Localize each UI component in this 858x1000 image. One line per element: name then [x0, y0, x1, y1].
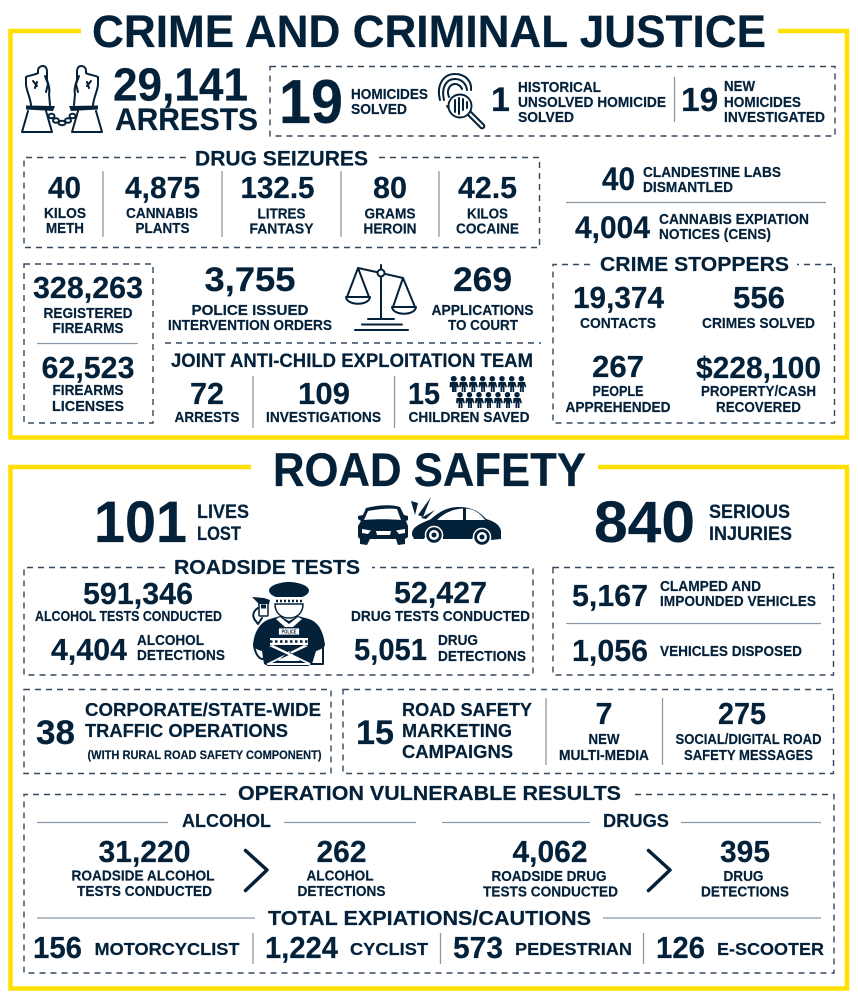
stat: new multi-media: MULTI-MEDIA — [559, 748, 649, 764]
stat: investigations: INVESTIGATIONS — [266, 410, 381, 426]
homicides solved — [279, 68, 428, 137]
panel: homicides — [270, 66, 835, 137]
stat: clamped vehicles: 5,167 — [572, 579, 648, 613]
stat: campaigns: CAMPAIGNS — [402, 741, 513, 762]
stat: fantasy: FANTASY — [250, 222, 314, 238]
stat: meth — [44, 171, 86, 237]
stat: motorcyclist: MOTORCYCLIST — [94, 939, 240, 959]
panel: firearms — [24, 264, 153, 423]
stat: social messages: 275 — [718, 697, 766, 731]
icon: car crash — [358, 497, 501, 546]
stat: cocaine: KILOS — [467, 206, 508, 222]
new homicides investigated: HOMICIDES — [724, 95, 801, 111]
stat: serious injuries: SERIOUS — [709, 501, 790, 523]
heading: crime stoppers: CRIME STOPPERS — [600, 253, 789, 276]
arrow: alcohol tests to detections — [246, 850, 267, 890]
panel: roadside tests — [24, 556, 533, 675]
stat: drug tests: 52,427 — [394, 575, 487, 610]
stat: roadside alcohol tests: 31,220 — [98, 835, 190, 869]
stat: people apprehended: APPREHENDED — [566, 400, 670, 416]
stat: alcohol detections: ALCOHOL — [137, 633, 204, 649]
stat: pedestrian: 573 — [453, 931, 503, 965]
stat: campaigns — [356, 699, 532, 762]
stat: serious injuries: 840 — [594, 490, 695, 555]
stat: clamped vehicles — [572, 579, 816, 613]
heading: operation vulnerable results: OPERATION VULNERABLE RESULTS — [238, 782, 621, 805]
stat: roadside drug tests: ROADSIDE DRUG — [492, 869, 606, 885]
stat: investigations: 109 — [298, 377, 350, 411]
heading: joint anti-child exploitation team: JOINT ANTI-CHILD EXPLOITATION TEAM — [171, 351, 533, 372]
homicides solved: 19 — [279, 68, 343, 137]
stat: campaigns: MARKETING — [402, 720, 512, 741]
heading: total expiations and cautions: TOTAL EXPIATIONS/CAUTIONS — [268, 907, 591, 930]
stat: alcohol detections: ALCOHOL — [306, 868, 374, 884]
stat: motorcyclist — [33, 931, 240, 965]
icon: children row — [449, 376, 526, 408]
stat: meth: KILOS — [44, 206, 86, 222]
arrests stat — [113, 58, 258, 137]
stat: cocaine: 42.5 — [458, 171, 517, 205]
stat: new multi-media: NEW — [588, 732, 620, 748]
stat: social messages: SAFETY MESSAGES — [684, 748, 813, 764]
stat: fantasy: 132.5 — [240, 171, 315, 205]
stat: cannabis expiation notices — [575, 209, 809, 245]
stat: pedestrian — [453, 931, 632, 965]
stat: cyclist: CYCLIST — [350, 939, 428, 959]
stat: crimes solved: 556 — [733, 281, 785, 315]
homicides solved: SOLVED — [351, 102, 407, 118]
stat: new multi-media — [559, 697, 649, 764]
stat: motorcyclist: 156 — [33, 931, 82, 965]
stat: social messages — [676, 697, 822, 764]
stat: alcohol detections: 262 — [316, 835, 366, 869]
stat: drug detections: 5,051 — [354, 633, 427, 667]
stat: fantasy: LITRES — [258, 206, 306, 222]
new homicides investigated: 19 — [681, 82, 718, 119]
panel: traffic operations: TRAFFIC OPERATIONS — [85, 720, 288, 741]
new homicides investigated: INVESTIGATED — [724, 110, 825, 126]
stat: intervention orders: 3,755 — [204, 261, 296, 299]
stat: contacts: CONTACTS — [580, 316, 656, 332]
stat: drug detections: DETECTIONS — [438, 649, 526, 665]
stat: roadside drug tests: 4,062 — [512, 835, 588, 869]
heading: roadside tests: ROADSIDE TESTS — [174, 556, 360, 579]
stat: applications to court: APPLICATIONS — [432, 303, 534, 319]
stat: cocaine — [456, 171, 519, 238]
stat: campaigns: ROAD SAFETY — [402, 699, 532, 720]
stat: team arrests: 72 — [190, 377, 224, 411]
stat: intervention orders: INTERVENTION ORDERS — [168, 318, 332, 334]
stat: children saved: 15 — [408, 377, 440, 411]
stat: serious injuries — [594, 490, 792, 555]
stat: cyclist: 1,224 — [265, 931, 338, 965]
icon: scales of justice — [346, 265, 416, 330]
stat: registered firearms: 328,263 — [33, 271, 143, 305]
stat: team arrests: ARRESTS — [174, 410, 240, 426]
stat: cannabis expiation notices: 4,004 — [575, 209, 650, 245]
stat: roadside drug tests: TESTS CONDUCTED — [483, 884, 618, 900]
stat: meth: 40 — [48, 171, 81, 205]
stat: new multi-media: 7 — [596, 697, 612, 731]
panel: crime stoppers — [553, 253, 834, 423]
historical unsolved homicide: UNSOLVED HOMICIDE — [518, 95, 666, 111]
stat: lives lost: LOST — [197, 523, 241, 545]
stat: heroin: 80 — [373, 171, 407, 205]
stat: firearms licenses: FIREARMS — [52, 383, 124, 399]
stat: clandestine labs — [602, 161, 781, 197]
stat: cocaine: COCAINE — [456, 222, 519, 238]
heading: drugs: DRUGS — [603, 811, 669, 831]
new homicides investigated — [681, 79, 825, 126]
stat: lives lost: LIVES — [197, 501, 249, 523]
stat: vehicles disposed: VEHICLES DISPOSED — [660, 644, 802, 660]
stat: firearms licenses: 62,523 — [42, 351, 134, 385]
stat: firearms licenses: LICENSES — [52, 399, 124, 415]
heading: alcohol: ALCOHOL — [182, 811, 271, 831]
stat: alcohol detections — [51, 633, 225, 667]
stat: e-scooter: E-SCOOTER — [717, 939, 824, 959]
stat: heroin: HEROIN — [364, 222, 416, 238]
stat: lives lost — [94, 490, 249, 555]
icon: police officer with breathalyser: POLICE — [282, 630, 297, 636]
stat: cannabis plants: PLANTS — [136, 221, 190, 237]
stat: alcohol tests: 591,346 — [83, 576, 193, 611]
stat: applications to court — [432, 261, 534, 334]
stat: alcohol tests — [35, 576, 222, 625]
panel: traffic operations: 38 — [36, 714, 75, 752]
historical unsolved homicide: HISTORICAL — [518, 80, 601, 96]
stat: e-scooter — [656, 931, 824, 965]
stat: roadside alcohol tests — [72, 835, 215, 900]
stat: lives lost: 101 — [94, 490, 187, 555]
panel: marketing campaigns — [343, 690, 834, 774]
stat: cannabis plants: CANNABIS — [126, 206, 198, 222]
stat: property recovered: RECOVERED — [716, 400, 801, 416]
stat: people apprehended — [566, 350, 670, 416]
panel: vehicles — [553, 568, 834, 675]
panel: operation vulnerable results — [24, 782, 834, 973]
stat: alcohol detections: 4,404 — [51, 633, 127, 667]
historical unsolved homicide: 1 — [491, 81, 510, 119]
new homicides investigated: NEW — [724, 79, 755, 95]
historical unsolved homicide: SOLVED — [518, 110, 574, 126]
stat: heroin: GRAMS — [364, 206, 416, 222]
stat: people apprehended: 267 — [592, 350, 644, 384]
stat: crimes solved — [702, 281, 815, 332]
stat: clamped vehicles: CLAMPED AND — [660, 579, 761, 595]
stat: applications to court: 269 — [453, 261, 512, 299]
stat: roadside alcohol tests: TESTS CONDUCTED — [77, 884, 212, 900]
panel: traffic operations: (WITH RURAL ROAD SAFETY COMPONENT) — [88, 750, 322, 762]
stat: clandestine labs: DISMANTLED — [643, 180, 733, 196]
stat: clandestine labs: CLANDESTINE LABS — [643, 165, 781, 181]
stat: registered firearms: REGISTERED — [44, 306, 132, 322]
stat: people apprehended: PEOPLE — [592, 384, 644, 400]
stat: team arrests — [174, 377, 240, 426]
historical unsolved homicide — [491, 80, 666, 126]
heading: drug seizures: DRUG SEIZURES — [195, 146, 368, 170]
stat: applications to court: TO COURT — [448, 318, 518, 334]
stat: investigations — [266, 377, 381, 426]
stat: alcohol detections: DETECTIONS — [298, 884, 386, 900]
stat: drug detections — [354, 633, 526, 667]
title: crime and criminal justice: CRIME AND CRIMINAL JUSTICE — [92, 6, 766, 57]
stat: alcohol detections — [298, 835, 386, 900]
stat: drug detections: DETECTIONS — [701, 884, 789, 900]
stat: children saved — [408, 377, 530, 426]
stat: fantasy — [240, 171, 315, 238]
stat: registered firearms — [33, 271, 143, 337]
stat: heroin — [364, 171, 416, 238]
stat: property recovered: PROPERTY/CASH — [701, 384, 816, 400]
title: road safety: ROAD SAFETY — [273, 443, 586, 496]
stat: campaigns: 15 — [356, 714, 394, 752]
stat: clamped vehicles: IMPOUNDED VEHICLES — [660, 594, 816, 610]
stat: cyclist — [265, 931, 428, 965]
panel: traffic operations — [24, 690, 331, 774]
stat: cannabis expiation notices: CANNABIS EXPIATION — [659, 212, 809, 228]
section frame: road safety — [10, 467, 847, 988]
icon: police officer with breathalyser — [252, 582, 325, 666]
stat: roadside alcohol tests: ROADSIDE ALCOHOL — [72, 868, 215, 884]
stat: drug detections: DRUG — [438, 633, 478, 649]
stat: alcohol detections: DETECTIONS — [137, 648, 225, 664]
stat: children saved: CHILDREN SAVED — [408, 410, 530, 426]
stat: meth: METH — [46, 221, 84, 237]
stat: intervention orders — [168, 261, 332, 334]
stat: crimes solved: CRIMES SOLVED — [702, 316, 815, 332]
stat: property recovered — [696, 351, 821, 416]
panel: drug seizures — [24, 146, 540, 248]
stat: social messages: SOCIAL/DIGITAL ROAD — [676, 732, 822, 748]
panel: traffic operations: CORPORATE/STATE-WIDE — [85, 699, 321, 720]
stat: roadside drug tests — [483, 835, 618, 900]
stat: e-scooter: 126 — [656, 931, 705, 965]
stat: drug detections — [701, 835, 789, 900]
icon: handcuffed hands — [22, 66, 102, 132]
stat: clandestine labs: 40 — [602, 161, 635, 197]
panel: joint anti-child exploitation team — [171, 351, 533, 428]
stat: drug detections: DRUG — [724, 869, 764, 885]
section frame: crime — [10, 31, 847, 438]
arrow: drug tests to detections — [648, 850, 670, 890]
stat: cannabis plants — [125, 171, 200, 237]
stat: drug tests — [351, 575, 530, 625]
icon: fingerprint and magnifier — [439, 74, 484, 128]
arrests stat: ARRESTS — [115, 101, 258, 137]
stat: intervention orders: POLICE ISSUED — [192, 303, 308, 319]
homicides solved: HOMICIDES — [351, 87, 428, 103]
stat: contacts — [573, 281, 664, 332]
stat: alcohol tests: ALCOHOL TESTS CONDUCTED — [35, 609, 222, 625]
arrests stat: 29,141 — [113, 58, 248, 110]
stat: firearms licenses — [42, 351, 134, 415]
stat: serious injuries: INJURIES — [709, 523, 792, 545]
stat: contacts: 19,374 — [573, 281, 664, 315]
stat: drug detections: 395 — [720, 835, 770, 869]
stat: vehicles disposed: 1,056 — [572, 634, 648, 668]
stat: vehicles disposed — [572, 634, 802, 668]
stat: property recovered: $228,100 — [696, 351, 821, 385]
stat: registered firearms: FIREARMS — [52, 321, 124, 337]
stat: cannabis expiation notices: NOTICES (CENS) — [659, 227, 771, 243]
stat: pedestrian: PEDESTRIAN — [515, 939, 632, 959]
stat: drug tests: DRUG TESTS CONDUCTED — [351, 609, 530, 625]
stat: cannabis plants: 4,875 — [125, 171, 200, 205]
